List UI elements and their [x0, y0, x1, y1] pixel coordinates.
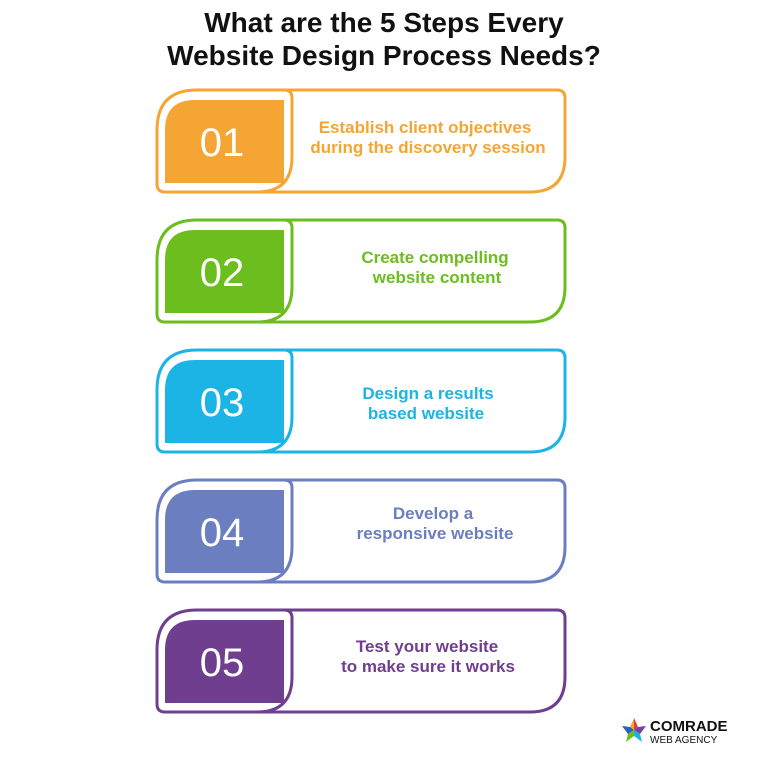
card 05: 05: [200, 641, 244, 685]
card 02: website content: [372, 268, 502, 287]
card 02: [157, 220, 565, 322]
title: [167, 7, 601, 71]
card 01: during the discovery session: [310, 138, 546, 157]
card 04: 04: [200, 511, 244, 555]
card 01: 01: [200, 121, 244, 165]
card 03: 03: [200, 381, 244, 425]
logo: [622, 718, 728, 746]
icon: star: [622, 718, 646, 742]
card 02: 02: [200, 251, 244, 295]
title: What are the 5 Steps Every: [204, 7, 564, 38]
logo: COMRADE: [650, 718, 728, 735]
card 05: Test your website: [356, 637, 498, 656]
card 04: Develop a: [393, 504, 474, 523]
card 03: based website: [368, 404, 484, 423]
card 01: Establish client objectives: [319, 118, 531, 137]
title: Website Design Process Needs?: [167, 40, 601, 71]
card 05: [157, 610, 565, 712]
card 01: [157, 90, 565, 192]
card 03: Design a results: [362, 384, 494, 403]
card 03: [157, 350, 565, 452]
card 04: responsive website: [357, 524, 513, 543]
card 05: to make sure it works: [341, 657, 515, 676]
card 02: Create compelling: [361, 248, 509, 267]
card 04: [157, 480, 565, 582]
logo: WEB AGENCY: [650, 735, 718, 746]
